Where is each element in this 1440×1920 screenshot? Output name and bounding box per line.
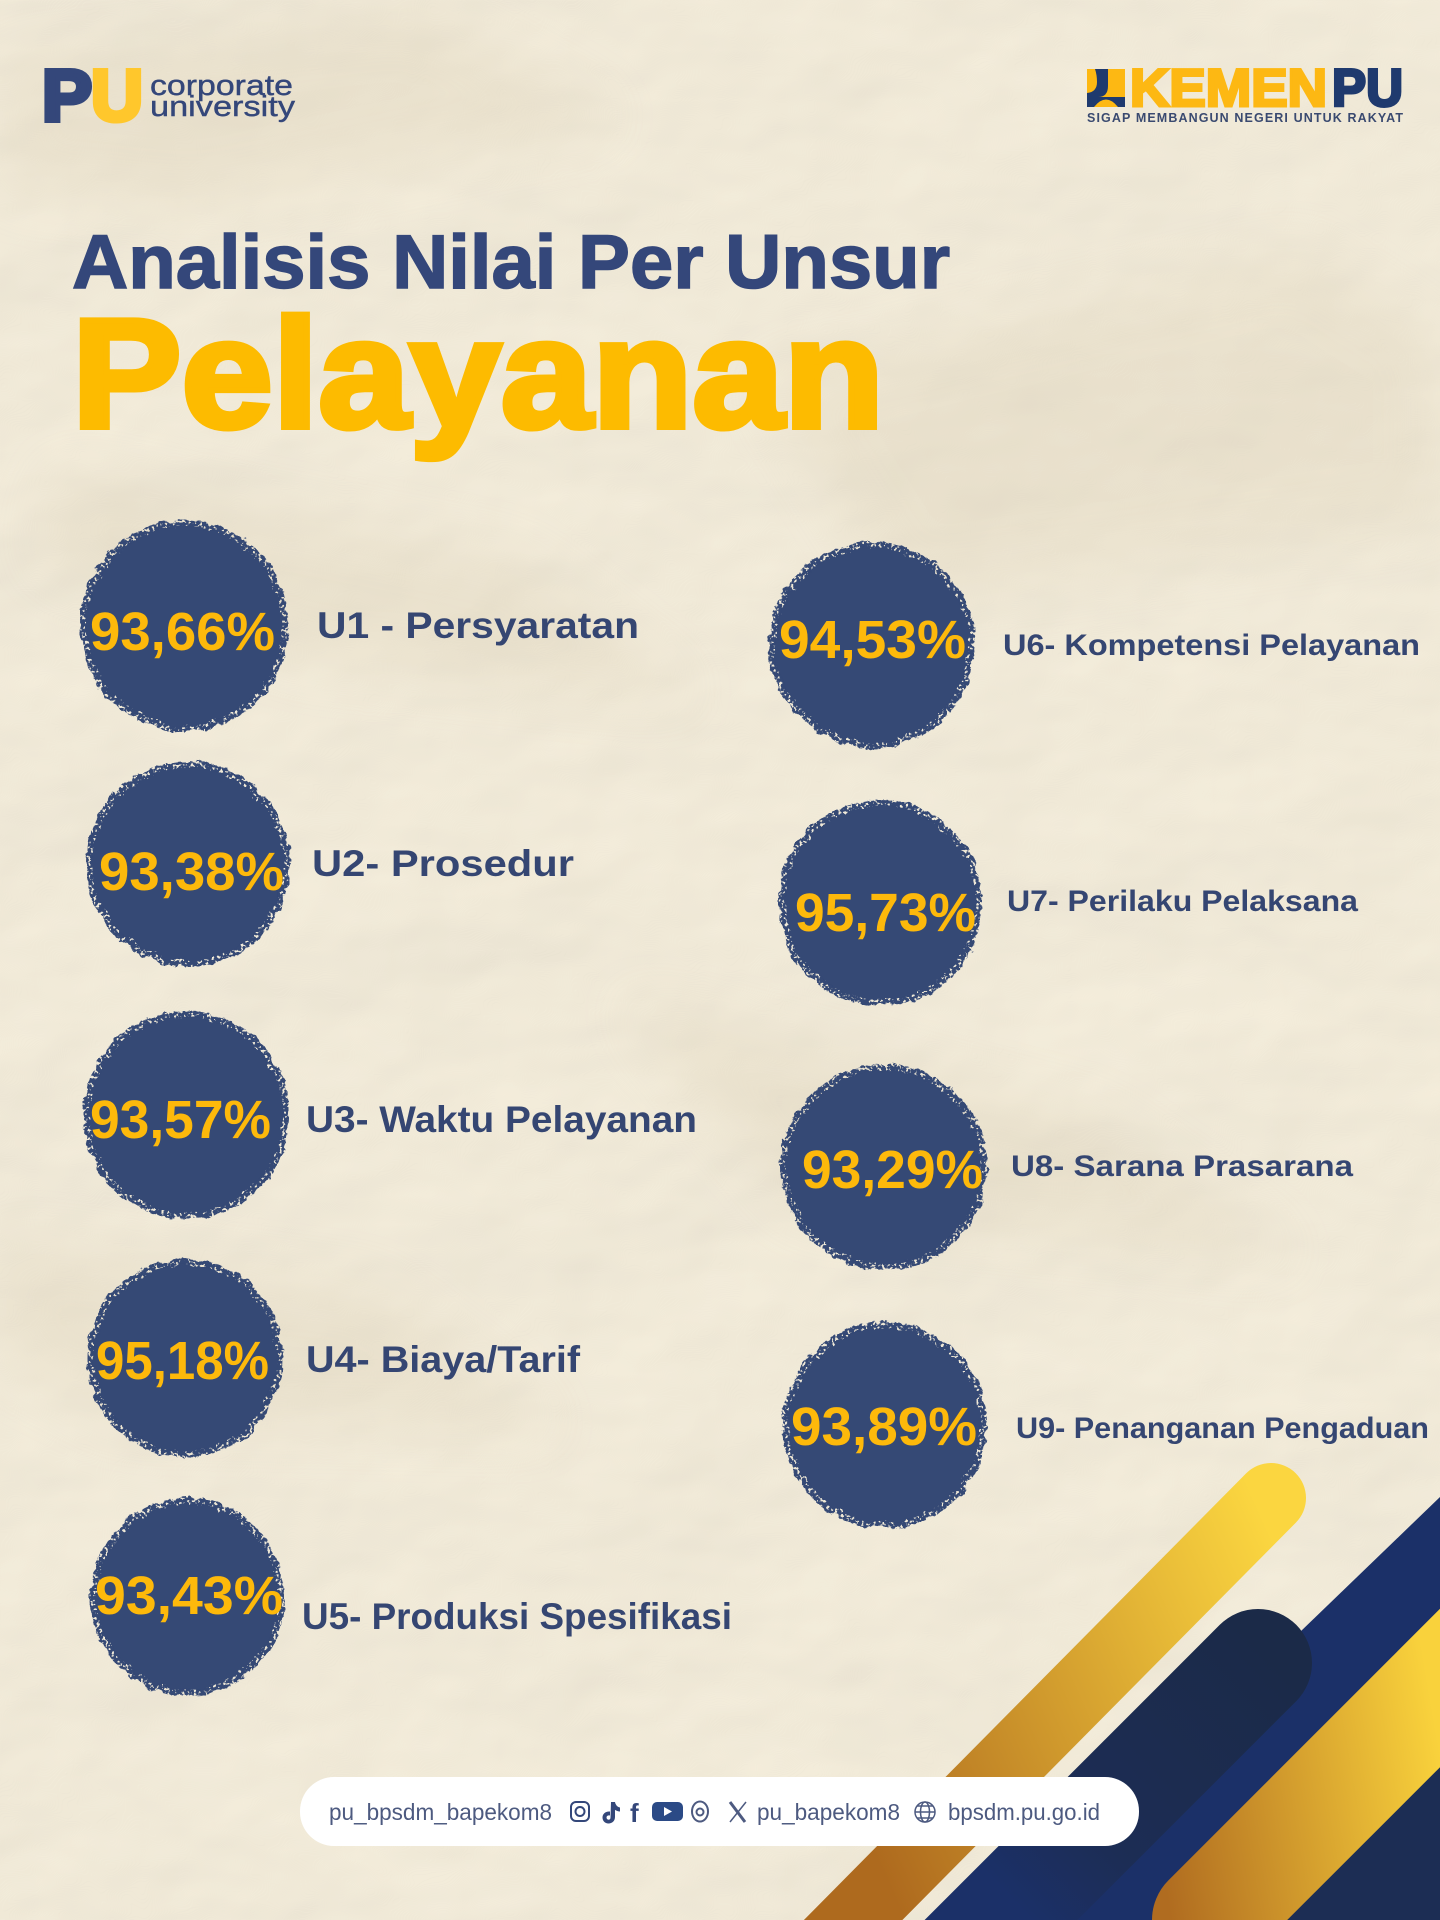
website text: bpsdm.pu.go.id xyxy=(948,1799,1100,1825)
label U5: U5- Produksi Spesifikasi xyxy=(302,1596,732,1637)
label U1: U1 - Persyaratan xyxy=(317,605,639,646)
icon: X xyxy=(730,1802,746,1822)
title line 1: Analisis Nilai Per Unsur xyxy=(72,220,950,305)
label U2: U2- Prosedur xyxy=(312,843,574,884)
navy diagonal band xyxy=(925,1497,1440,1920)
item U7 xyxy=(778,800,1358,1006)
item U3 xyxy=(83,1011,697,1219)
badge U3 xyxy=(83,1011,289,1219)
tagline: SIGAP MEMBANGUN NEGERI UNTUK RAKYAT xyxy=(1087,111,1403,125)
label U4: U4- Biaya/Tarif xyxy=(306,1339,581,1380)
icon: youtube xyxy=(652,1802,683,1821)
footer pill xyxy=(300,1777,1139,1846)
logo emblem xyxy=(1087,69,1125,107)
value U8: 93,29% xyxy=(802,1140,983,1200)
value U5: 93,43% xyxy=(95,1566,283,1626)
icon: globe xyxy=(915,1802,935,1822)
icon: tiktok xyxy=(602,1802,620,1824)
icon: instagram xyxy=(571,1802,589,1821)
logo: PU corporate university xyxy=(42,56,296,136)
logo text university: university xyxy=(150,91,296,123)
background: soft paper creases xyxy=(0,10,1440,1430)
item U8 xyxy=(781,1064,1353,1270)
label U7: U7- Perilaku Pelaksana xyxy=(1007,885,1358,918)
badge U1 xyxy=(80,520,288,732)
label U9: U9- Penanganan Pengaduan xyxy=(1016,1412,1429,1445)
badge U4 xyxy=(87,1259,283,1457)
badge U6 xyxy=(769,542,975,748)
footer contact bar xyxy=(300,1777,1139,1846)
label U8: U8- Sarana Prasarana xyxy=(1011,1150,1353,1183)
upper yellow pill xyxy=(804,1463,1306,1920)
value U3: 93,57% xyxy=(90,1090,271,1150)
value U1: 93,66% xyxy=(90,602,275,662)
badge U2 xyxy=(86,761,290,967)
logo letter P: P xyxy=(42,56,92,136)
item U5 xyxy=(90,1498,732,1696)
item U1 xyxy=(80,520,639,732)
value U7: 95,73% xyxy=(795,883,976,943)
label U6: U6- Kompetensi Pelayanan xyxy=(1003,629,1420,662)
lower yellow pill xyxy=(1152,1609,1440,1920)
dark rounded pill xyxy=(925,1609,1312,1920)
title line 2: Pelayanan xyxy=(72,287,884,460)
value U4: 95,18% xyxy=(96,1331,269,1391)
logo: KEMENPU xyxy=(1087,59,1403,125)
badge U9 xyxy=(783,1322,987,1528)
handle text X: pu_bapekom8 xyxy=(757,1799,900,1825)
logo letter U: U xyxy=(91,56,143,136)
value U6: 94,53% xyxy=(779,610,966,670)
wordmark KEMEN: KEMEN xyxy=(1130,59,1327,118)
decorative diagonal bands xyxy=(804,1463,1440,1920)
wordmark PU: PU xyxy=(1332,59,1403,118)
icon: threads xyxy=(692,1802,708,1822)
value U9: 93,89% xyxy=(791,1397,977,1457)
label U3: U3- Waktu Pelayanan xyxy=(306,1099,697,1140)
dark corner xyxy=(1230,1700,1440,1920)
logo text corporate: corporate xyxy=(150,70,293,102)
value U2: 93,38% xyxy=(99,842,284,902)
title xyxy=(72,220,950,460)
item U9 xyxy=(783,1322,1429,1528)
handle text: pu_bpsdm_bapekom8 xyxy=(329,1799,552,1825)
item U4 xyxy=(87,1259,581,1457)
icon: facebook: f xyxy=(630,1798,639,1828)
badge U7 xyxy=(778,800,982,1006)
badge U5 xyxy=(90,1498,284,1696)
badge U8 xyxy=(781,1064,987,1270)
item U6 xyxy=(769,542,1420,748)
item U2 xyxy=(86,761,574,967)
